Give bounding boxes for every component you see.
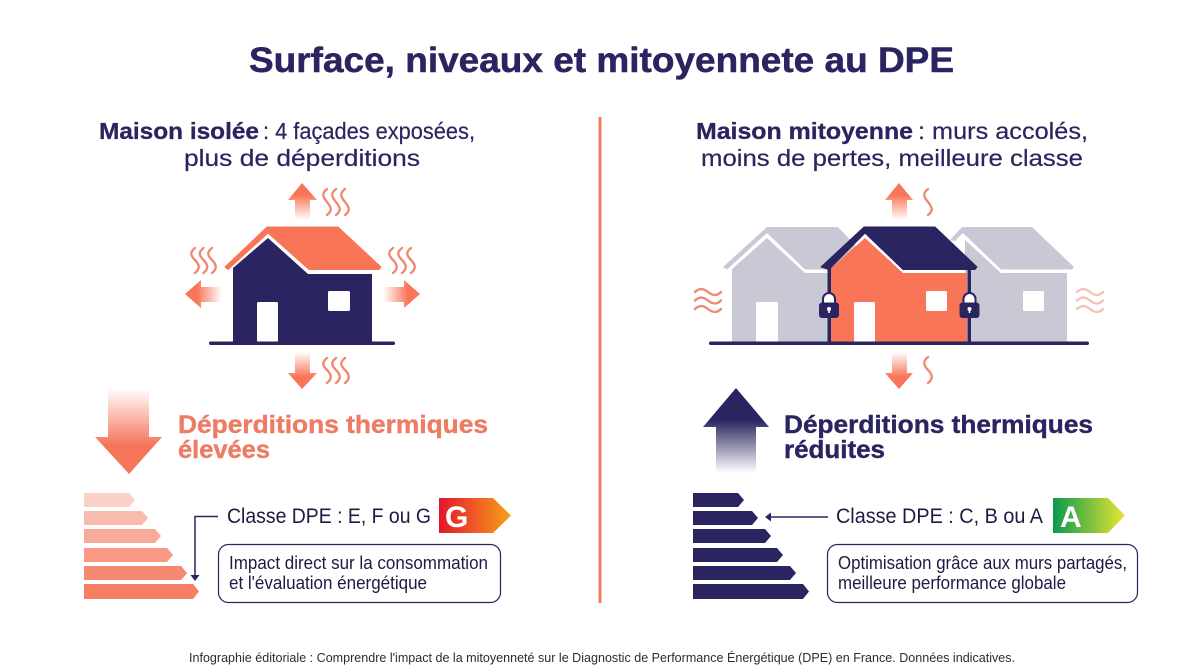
arrow: reduced loss up [885, 183, 913, 220]
heading: maison mitoyenne: moins de pertes, meilleure classe [701, 145, 1083, 171]
heading: déperditions réduites [784, 411, 1093, 464]
label: classe DPE: Classe DPE : C, B ou A [836, 505, 1043, 528]
arrow: reduced loss down [885, 352, 913, 389]
arrow: large upward [703, 388, 769, 473]
callout: impact [218, 544, 500, 602]
badge: class G [439, 498, 511, 534]
icon: padlock left [819, 293, 839, 318]
footer note: Infographie éditoriale : Comprendre l'impact de la mitoyenneté sur le Diagnostic de Performance Énergétique (DPE) en France. Données indicatives. [189, 650, 1015, 665]
heading: maison isolée [99, 118, 475, 171]
title: Surface, niveaux et mitoyennete au DPE [249, 41, 954, 80]
heading: maison isolée: : 4 façades exposées, [263, 118, 475, 144]
heading: déperditions réduites: Déperditions thermiques [784, 411, 1093, 439]
badge: class A: A [1060, 501, 1082, 534]
icon: heat waves [191, 189, 415, 383]
arrow: heat loss right [383, 280, 420, 308]
arrow: heat loss up [288, 183, 317, 220]
panel: maison mitoyenne [693, 118, 1138, 602]
heading: maison mitoyenne: : murs accolés, [918, 118, 1088, 144]
arrow: large downward [95, 388, 162, 474]
icon: ground line [709, 342, 1089, 345]
panel: maison isolée [84, 118, 511, 602]
icon: small heat waves [695, 189, 1103, 383]
icon: left neighbour house [723, 227, 860, 342]
chart: energy scale [693, 493, 809, 599]
badge: class A [1053, 498, 1125, 534]
callout: optimisation: Optimisation grâce aux murs partagés, [838, 552, 1127, 573]
chart: energy scale [84, 493, 199, 599]
heading: déperditions élevées: élevées [178, 436, 270, 464]
callout: optimisation [828, 544, 1138, 602]
heading: maison mitoyenne: Maison mitoyenne [696, 118, 913, 144]
heading: maison mitoyenne [696, 118, 1088, 171]
heading: déperditions élevées: Déperditions thermiques [178, 411, 488, 439]
badge: class G: G [445, 501, 468, 534]
icon: padlock right [960, 293, 980, 318]
icon: central house [821, 227, 977, 343]
arrow: heat loss down [288, 352, 317, 389]
icon: right neighbour house [950, 227, 1074, 342]
heading: déperditions élevées [178, 411, 488, 464]
callout: optimisation: meilleure performance globale [838, 572, 1066, 593]
divider between panels [598, 117, 602, 603]
arrow: connector to energy scale [765, 512, 828, 522]
callout: impact: Impact direct sur la consommation [229, 552, 488, 573]
label: classe DPE: Classe DPE : E, F ou G [227, 505, 431, 528]
heading: déperditions réduites: réduites [784, 436, 885, 464]
heading: maison isolée: plus de déperditions [184, 145, 420, 171]
arrow: heat loss left [185, 280, 222, 308]
icon: detached house [209, 227, 395, 345]
arrow: connector to energy scale [190, 516, 218, 581]
heading: maison isolée: Maison isolée [99, 118, 259, 144]
callout: impact: et l'évaluation énergétique [229, 572, 427, 593]
